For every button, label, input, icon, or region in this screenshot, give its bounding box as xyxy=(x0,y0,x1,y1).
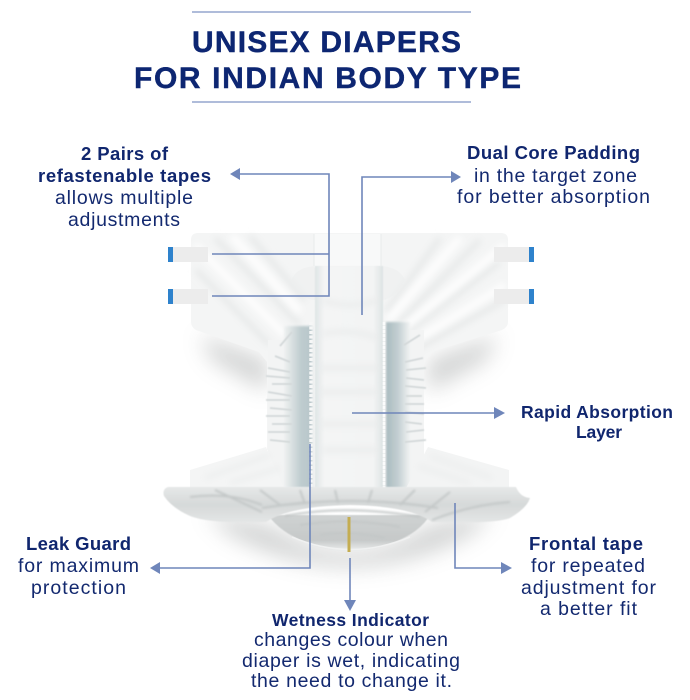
text: dual core padding: in the target zone xyxy=(474,165,637,187)
text: leak guard: Leak Guard xyxy=(26,533,131,554)
back panel xyxy=(191,233,508,450)
front bowl xyxy=(268,515,430,551)
diaper illustration xyxy=(164,233,530,566)
front band xyxy=(164,487,530,522)
text: refastenable tapes xyxy=(38,143,211,231)
title: FOR INDIAN BODY TYPE xyxy=(134,62,521,95)
text: wetness indicator: diaper is wet, indicating xyxy=(242,650,460,672)
text: refastenable tapes: 2 Pairs of xyxy=(81,143,169,164)
text: leak guard: for maximum xyxy=(18,555,139,577)
text: wetness indicator xyxy=(242,610,460,692)
front wings xyxy=(190,447,284,488)
text: frontal tape: for repeated xyxy=(531,555,645,577)
arrow: rapid absorption xyxy=(352,407,505,419)
icon: right tapes xyxy=(494,247,534,304)
arrow: wetness indicator xyxy=(344,558,356,611)
text: rapid absorption xyxy=(521,402,673,442)
text: wetness indicator: changes colour when xyxy=(254,629,448,651)
soft shadows beneath the diaper xyxy=(200,335,498,566)
text: frontal tape: adjustment for xyxy=(521,577,656,599)
back panel gathers xyxy=(196,236,505,350)
text: frontal tape: Frontal tape xyxy=(529,533,643,554)
ruffled leg edges xyxy=(266,332,426,442)
text: dual core padding: Dual Core Padding xyxy=(467,142,640,163)
icon: left tapes xyxy=(168,247,208,304)
text: wetness indicator: the need to change it. xyxy=(251,670,452,692)
text: wetness indicator: Wetness Indicator xyxy=(272,610,429,630)
text: rapid absorption: Layer xyxy=(576,422,622,442)
text: frontal tape xyxy=(521,533,656,620)
text: leak guard: protection xyxy=(31,577,126,599)
gather columns xyxy=(268,322,424,488)
band pleats xyxy=(190,490,510,538)
text: leak guard xyxy=(18,533,139,599)
absorbent core xyxy=(315,266,383,488)
text: dual core padding: for better absorption xyxy=(457,186,650,208)
arrow: refastenable tapes xyxy=(212,168,329,296)
text: refastenable tapes: adjustments xyxy=(68,209,180,231)
text: refastenable tapes: allows multiple xyxy=(55,187,193,209)
inner elastic edges xyxy=(309,322,313,488)
title xyxy=(134,12,521,102)
wetness strip xyxy=(348,517,350,552)
waist strip and fold lines xyxy=(314,234,381,268)
text: rapid absorption: Rapid Absorption xyxy=(521,402,673,422)
bowl edge highlight xyxy=(292,537,410,550)
arrow: dual core padding xyxy=(362,171,461,315)
arrow: frontal tape xyxy=(455,503,512,574)
text: refastenable tapes: refastenable tapes xyxy=(38,165,211,186)
arrow: leak guard xyxy=(150,444,310,574)
text: frontal tape: a better fit xyxy=(540,598,638,620)
text: dual core padding xyxy=(457,142,650,208)
title: UNISEX DIAPERS xyxy=(192,26,461,59)
